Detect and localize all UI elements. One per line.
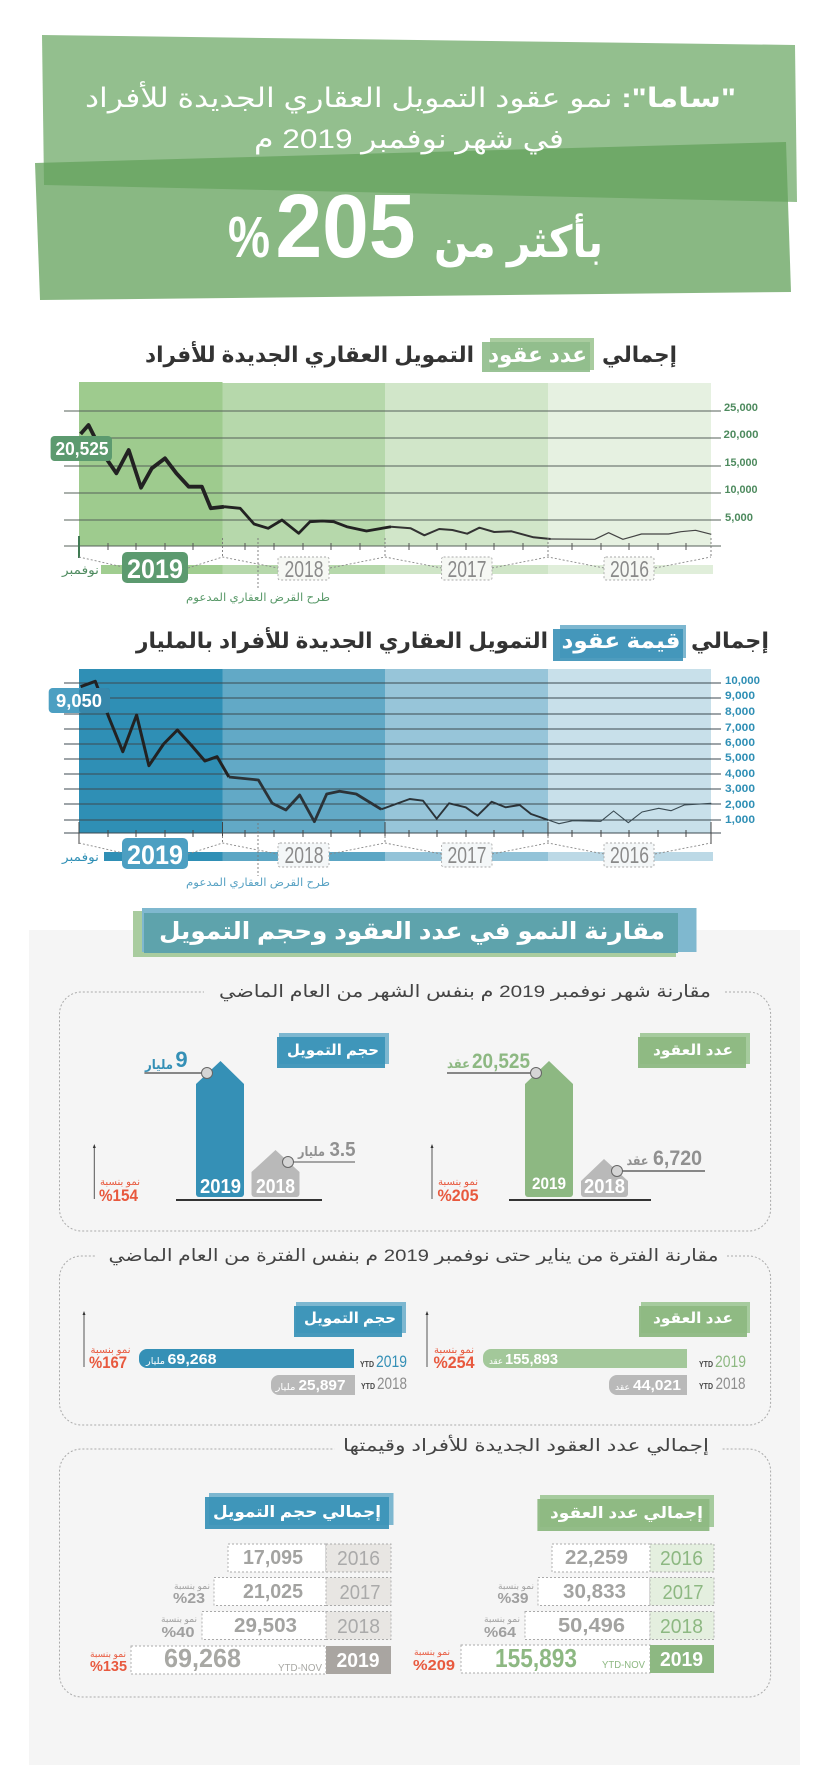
- row: 2016 financing: [228, 1544, 391, 1572]
- panel dashed border: [60, 992, 771, 1231]
- growth: 209 percent: %209: [413, 1657, 455, 1674]
- bar: contracts YTD 2018: [609, 1375, 687, 1395]
- year braces: [79, 557, 711, 568]
- bar: contracts 2018: 2018: [584, 1176, 625, 1198]
- november label: نوفمبر: [61, 563, 99, 578]
- growth: 135 percent: %135: [90, 1658, 127, 1675]
- label: YTD 2019 financing: YTD: [360, 1360, 374, 1369]
- callout: 3.5 billion: 3.5: [330, 1139, 356, 1161]
- year braces: [79, 843, 711, 854]
- callout: 20,525: [447, 1050, 542, 1078]
- row: 2016 contracts: [552, 1544, 714, 1572]
- bar: contracts YTD 2018: عقد: [615, 1382, 630, 1392]
- row: 2019 contracts: [461, 1643, 714, 1673]
- callout: 9 billion: 9: [175, 1047, 188, 1072]
- growth: 64 percent: %64: [484, 1624, 517, 1641]
- tag: financing volume: حجم التمويل: [304, 1310, 396, 1327]
- callout: 9 billion: مليار: [144, 1057, 173, 1072]
- panel title: إجمالي عدد العقود الجديدة للأفراد وقيمتها: [343, 1435, 709, 1456]
- financing baseline: [176, 1199, 322, 1201]
- year 2017 box: 2017: [448, 842, 486, 868]
- banner upper green panel: [42, 35, 797, 202]
- row: 2019 financing: 2019: [336, 1650, 380, 1672]
- y axis labels: 8,000: [725, 706, 755, 718]
- heading text: مقارنة النمو في عدد العقود وحجم التمويل: [159, 918, 665, 945]
- y axis labels: 15,000: [724, 457, 758, 469]
- heading highlighted words: عدد عقود: [488, 342, 587, 368]
- grid lines: [64, 411, 721, 546]
- label: YTD 2019 contracts: [699, 1352, 746, 1371]
- label: YTD 2018 contracts: YTD: [699, 1382, 713, 1391]
- growth: 209 percent: [413, 1647, 455, 1674]
- callout: 3.5 billion: مليار: [297, 1144, 325, 1159]
- row: 2016 financing: 2016: [337, 1548, 380, 1570]
- axis ticks: [79, 822, 711, 844]
- value tag 20,525: 20,525: [56, 439, 108, 459]
- bar: financing 2018: [252, 1150, 300, 1198]
- heading green layer: [133, 911, 676, 957]
- tag: financing volume: [277, 1033, 389, 1068]
- label: YTD 2018 contracts: 2018: [716, 1374, 746, 1393]
- y axis labels: 9,000: [725, 690, 755, 702]
- growth: 154 percent: %154: [99, 1186, 138, 1205]
- subsidized loan marker: [257, 823, 259, 876]
- bar: financing 2018: 2018: [256, 1176, 295, 1198]
- growth: 64 percent: نمو بنسبة: [484, 1614, 520, 1624]
- label: YTD 2019 financing: 2019: [376, 1352, 407, 1371]
- growth: 254 percent: [426, 1311, 475, 1372]
- growth: 40 percent: %40: [162, 1624, 194, 1641]
- value tag 9,050: [49, 688, 110, 713]
- row: 2018 contracts: 50,496: [558, 1615, 625, 1637]
- year bands: [79, 669, 711, 833]
- row: 2017 financing: 2017: [340, 1582, 380, 1604]
- axis ticks: [108, 543, 686, 550]
- tag: contracts: [639, 1302, 750, 1337]
- growth: 209 percent: نمو بنسبة: [414, 1647, 450, 1657]
- section heading: [133, 908, 696, 957]
- panel title: مقارنة الفترة من يناير حتى نوفمبر 2019 م بنفس الفترة من العام الماضي: [108, 1246, 718, 1266]
- growth: 167 percent: نمو بنسبة: [90, 1345, 130, 1356]
- year 2016 box: 2016: [610, 842, 649, 868]
- bar: financing 2019: [196, 1061, 244, 1198]
- row: 2017 contracts: 2017: [662, 1582, 704, 1604]
- timeline bar: [104, 852, 713, 861]
- bar: financing YTD 2019: [139, 1349, 354, 1368]
- growth: 64 percent: [484, 1614, 520, 1641]
- growth: 154 percent: [93, 1144, 140, 1205]
- tag: total contracts: إجمالي عدد العقود: [550, 1505, 703, 1523]
- row: 2018 contracts: 2018: [660, 1616, 703, 1638]
- row: 2017 contracts: 30,833: [563, 1581, 626, 1603]
- panel: year to date comparison: [60, 1246, 771, 1425]
- bar: contracts YTD 2019: 155,893: [505, 1351, 558, 1368]
- year 2016 box: 2016: [610, 556, 649, 582]
- row: 2018 financing: 29,503: [234, 1615, 297, 1637]
- tag: financing volume: [294, 1302, 406, 1337]
- tag: total financing: إجمالي حجم التمويل: [213, 1504, 381, 1522]
- heading highlight box: [553, 625, 686, 661]
- growth: 135 percent: [90, 1649, 127, 1675]
- heading highlighted words: قيمة عقود: [562, 628, 680, 654]
- growth: 135 percent: نمو بنسبة: [90, 1649, 126, 1659]
- growth: 154 percent: نمو بنسبة: [100, 1177, 140, 1188]
- y axis labels: 5,000: [725, 752, 755, 764]
- bar: financing YTD 2018: 25,897: [298, 1377, 346, 1394]
- callout: 6,720: 6,720: [653, 1147, 702, 1170]
- tag: total financing: [205, 1493, 394, 1529]
- y axis labels: 3,000: [725, 783, 755, 795]
- panel title: مقارنة شهر نوفمبر 2019 م بنفس الشهر من العام الماضي: [219, 982, 711, 1002]
- heading rest: التمويل العقاري الجديدة للأفراد بالمليار: [135, 626, 548, 654]
- big percent sign: %: [228, 205, 270, 270]
- trend line: [81, 681, 711, 824]
- growth: 254 percent: نمو بنسبة: [434, 1345, 474, 1356]
- timeline bar: [101, 565, 713, 574]
- y axis labels: 2,000: [725, 799, 755, 811]
- year 2019 box: 2019: [127, 840, 183, 870]
- tag: total contracts: [537, 1495, 714, 1531]
- y axis labels: 1,000: [725, 814, 755, 826]
- heading blue layer: [142, 908, 696, 952]
- y axis labels: [725, 675, 760, 826]
- tag: contracts: عدد العقود: [653, 1310, 733, 1327]
- heading: number of contracts chart: [145, 338, 677, 372]
- year 2018 box: 2018: [284, 556, 324, 582]
- label: YTD 2019 contracts: YTD: [699, 1360, 713, 1369]
- big number 205: 205: [276, 177, 416, 277]
- bar: financing YTD 2019: مليار: [145, 1356, 165, 1366]
- bar: contracts 2019: 2019: [532, 1174, 566, 1193]
- growth: 23 percent: [173, 1581, 210, 1607]
- y axis labels: 20,000: [724, 429, 758, 441]
- bar: contracts 2018: [581, 1159, 628, 1198]
- y axis labels: 5,000: [725, 512, 753, 524]
- panel dashed border: [60, 1256, 771, 1425]
- y axis labels: 10,000: [724, 484, 758, 496]
- y axis labels: [724, 402, 758, 524]
- table: financing by year: [131, 1544, 391, 1674]
- growth: 254 percent: %254: [434, 1353, 475, 1372]
- panel: growth comparison background: [29, 930, 800, 1765]
- heading highlight box: [482, 338, 594, 372]
- table: contracts by year: [461, 1544, 714, 1673]
- year 2018 box: 2018: [284, 842, 324, 868]
- contracts baseline: [509, 1199, 651, 1201]
- growth: 23 percent: نمو بنسبة: [174, 1581, 210, 1591]
- year bands: [79, 382, 711, 546]
- row: 2017 financing: [214, 1578, 391, 1606]
- heading rest: التمويل العقاري الجديدة للأفراد: [145, 340, 474, 368]
- bar: contracts YTD 2018: 44,021: [633, 1377, 681, 1394]
- row: 2018 financing: 2018: [337, 1616, 380, 1638]
- bar: financing YTD 2019: 69,268: [168, 1351, 216, 1368]
- row: 2018 contracts: [525, 1612, 714, 1640]
- chart: number of contracts: [51, 382, 759, 604]
- heading: value of contracts chart: [135, 625, 769, 661]
- bar: contracts 2019: [525, 1061, 573, 1197]
- growth: 167 percent: %167: [89, 1353, 127, 1372]
- banner lower green panel: [35, 142, 791, 300]
- growth: 23 percent: %23: [173, 1590, 205, 1607]
- label: YTD 2018 financing: [361, 1374, 407, 1393]
- year 2019 box: 2019: [127, 554, 183, 584]
- chart: value of contracts: [49, 669, 760, 889]
- growth: 205 percent: نمو بنسبة: [438, 1177, 478, 1188]
- subsidized loan label: طرح القرض العقاري المدعوم: [186, 592, 330, 604]
- callout: 9 billion: [144, 1047, 212, 1078]
- label: YTD 2018 contracts: [699, 1374, 746, 1393]
- year boundary dashed ticks: [222, 836, 548, 844]
- y axis labels: 7,000: [725, 722, 755, 734]
- y axis labels: 10,000: [725, 675, 760, 687]
- bar: financing YTD 2018: مليار: [274, 1382, 296, 1392]
- november tick: [78, 536, 80, 558]
- bar: financing 2019: 2019: [200, 1176, 241, 1198]
- row: 2019 contracts: YTD-NOV: [602, 1660, 645, 1671]
- growth: 205 percent: [430, 1144, 478, 1205]
- callout: 6,720: [612, 1147, 705, 1176]
- row: 2016 financing: 17,095: [243, 1547, 303, 1569]
- panel dashed border: [60, 1449, 771, 1697]
- tag: contracts: عدد العقود: [653, 1042, 733, 1059]
- tag: contracts: [638, 1033, 750, 1068]
- callout: 20,525: عقد: [447, 1056, 470, 1071]
- trend line: [81, 425, 711, 539]
- year 2017 box: 2017: [448, 556, 486, 582]
- y axis labels: 25,000: [724, 402, 758, 414]
- bar: financing YTD 2018: [271, 1375, 355, 1395]
- growth: 39 percent: نمو بنسبة: [498, 1581, 534, 1591]
- subsidized loan label: طرح القرض العقاري المدعوم: [186, 877, 330, 889]
- row: 2019 contracts: 155,893: [495, 1643, 577, 1673]
- growth: 167 percent: [82, 1311, 130, 1372]
- label: YTD 2019 contracts: 2019: [715, 1352, 746, 1371]
- row: 2016 contracts: 2016: [660, 1548, 703, 1570]
- subsidized loan marker: [257, 538, 259, 590]
- label: YTD 2018 financing: YTD: [361, 1382, 375, 1391]
- heading word total: إجمالي: [691, 628, 769, 654]
- row: 2019 financing: 69,268: [164, 1643, 241, 1673]
- heading teal layer: [144, 913, 678, 953]
- header banner: [35, 35, 797, 300]
- bar: contracts YTD 2019: عقد: [489, 1356, 503, 1366]
- november label: نوفمبر: [61, 850, 99, 865]
- year boundary ticks: [222, 538, 711, 557]
- y axis labels: 6,000: [725, 737, 755, 749]
- growth: 40 percent: [161, 1614, 197, 1641]
- row: 2017 contracts: [538, 1578, 714, 1606]
- value tag 9,050: 9,050: [56, 691, 102, 711]
- grid lines: [64, 683, 721, 833]
- row: 2018 financing: [202, 1612, 391, 1640]
- growth: 39 percent: %39: [498, 1590, 528, 1607]
- tag: financing volume: حجم التمويل: [287, 1042, 379, 1059]
- headline line one: "ساما": نمو عقود التمويل العقاري الجديدة للأفراد: [85, 80, 736, 114]
- row: 2019 contracts: 2019: [660, 1649, 703, 1671]
- row: 2019 financing: YTD-NOV: [278, 1663, 322, 1674]
- heading word total: إجمالي: [602, 342, 677, 368]
- label: YTD 2018 financing: 2018: [377, 1374, 407, 1393]
- row: 2017 financing: 21,025: [243, 1581, 303, 1603]
- growth: 40 percent: نمو بنسبة: [161, 1614, 197, 1624]
- y axis labels: 4,000: [725, 768, 755, 780]
- growth: 205 percent: %205: [438, 1186, 478, 1205]
- callout: 6,720: عقد: [626, 1153, 648, 1168]
- row: 2019 financing: [131, 1643, 391, 1674]
- panel: totals: [60, 1435, 771, 1697]
- panel: november comparison: [60, 982, 771, 1231]
- bar: contracts YTD 2019: [483, 1349, 687, 1368]
- growth: 39 percent: [498, 1581, 534, 1607]
- row: 2016 contracts: 22,259: [565, 1547, 628, 1569]
- callout: 3.5 billion: [282, 1139, 356, 1168]
- big words more than: بأكثر من: [434, 213, 603, 268]
- label: YTD 2019 financing: [360, 1352, 407, 1371]
- headline line two: في شهر نوفمبر 2019 م: [254, 124, 564, 155]
- callout: 20,525: 20,525: [472, 1050, 530, 1073]
